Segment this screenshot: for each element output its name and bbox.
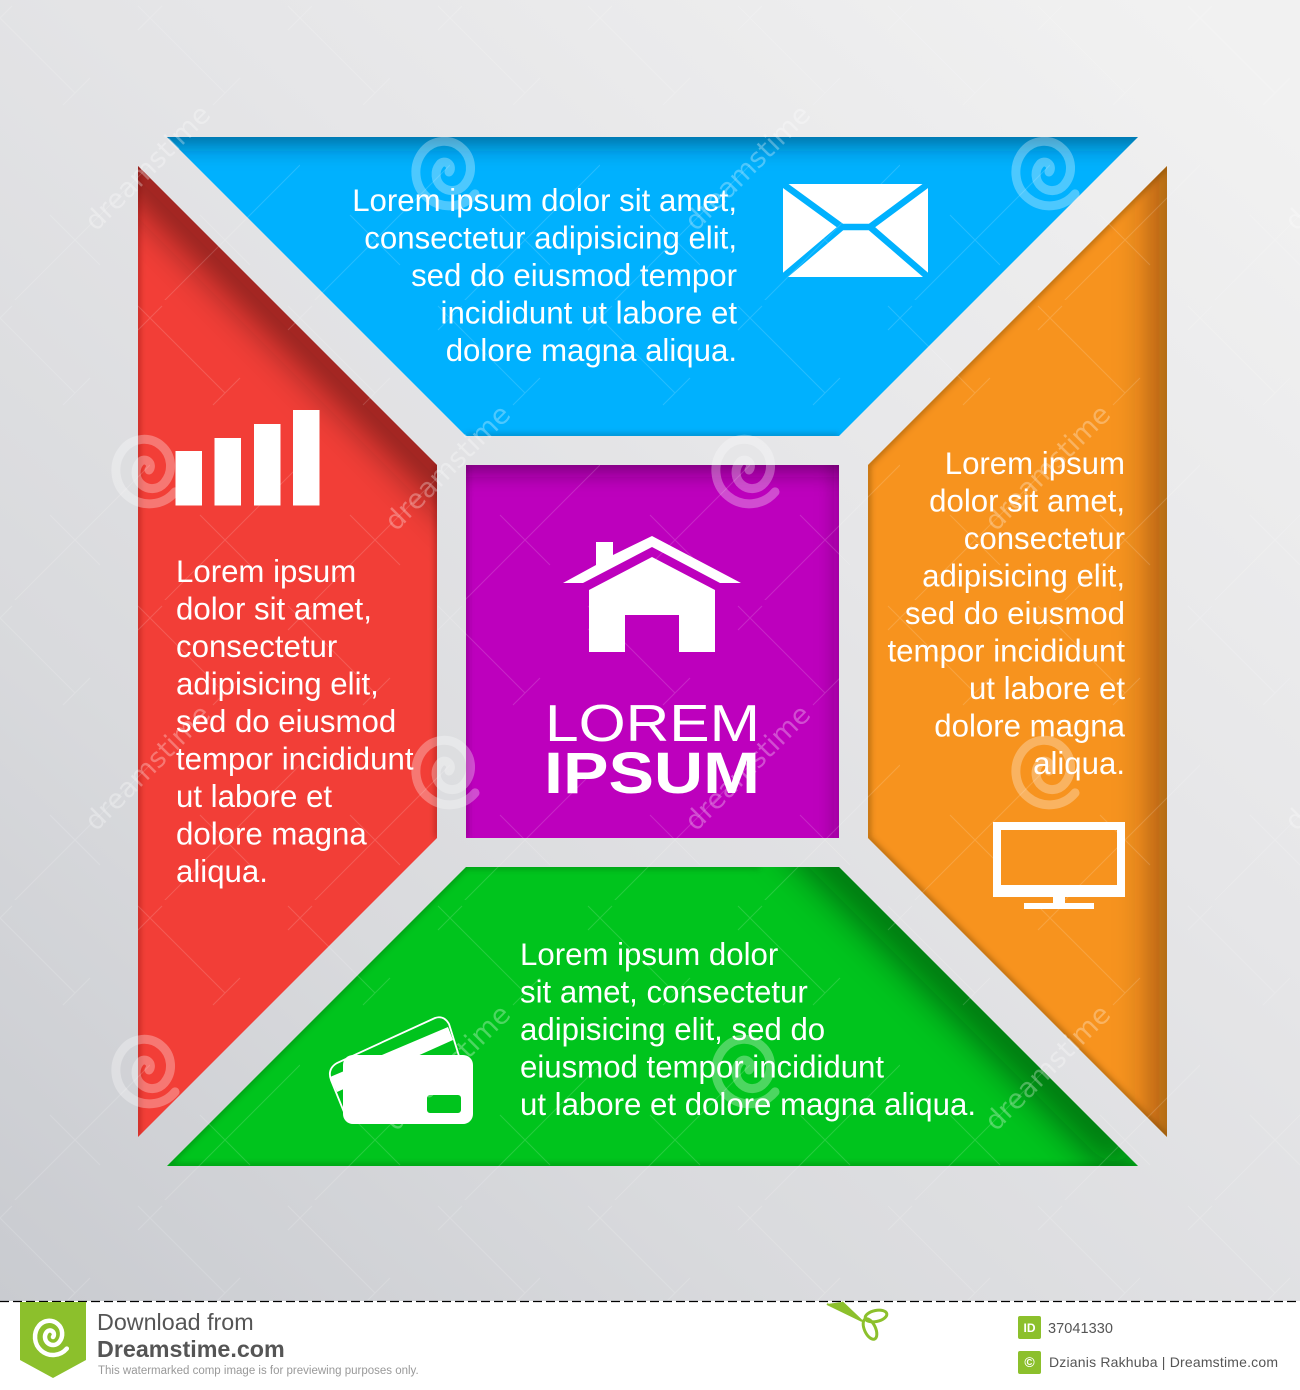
author row: Dzianis Rakhuba | Dreamstime.com <box>1049 1354 1278 1370</box>
author row: © <box>1024 1354 1035 1370</box>
icon: dreamstime badge <box>20 1302 86 1378</box>
text: red panel: ut labore et <box>176 779 332 814</box>
text: red panel: dolore magna <box>176 816 367 852</box>
panel: red left <box>138 166 437 1137</box>
text: orange panel: ut labore et <box>969 671 1125 706</box>
text: orange panel: adipisicing elit, <box>922 558 1125 594</box>
id row: ID <box>1024 1321 1036 1335</box>
text: blue panel: sed do eiusmod tempor <box>411 258 737 293</box>
text: blue panel: consectetur adipisicing elit, <box>364 220 737 256</box>
text: orange panel: dolor sit amet, <box>929 484 1125 518</box>
watermark: dreamstime text: dreamstime <box>79 699 217 837</box>
watermark: dreamstime text: dreamstime <box>379 399 517 537</box>
text: download from: Download from <box>97 1309 254 1335</box>
icon: monitor <box>993 822 1125 909</box>
text: green panel: eiusmod tempor incididunt <box>520 1050 884 1084</box>
text: blue panel <box>352 183 737 368</box>
icon: house <box>563 536 741 652</box>
panel: orange right <box>868 166 1167 1137</box>
text: orange panel: sed do eiusmod <box>905 596 1125 631</box>
text: blue panel: incididunt ut labore et <box>441 296 737 330</box>
watermark: dreamstime text: dreamstime <box>979 999 1117 1137</box>
id row <box>1018 1316 1113 1339</box>
text: green panel: sit amet, consectetur <box>520 974 808 1010</box>
text: red panel: aliqua. <box>176 854 268 889</box>
icon: scissors <box>827 1302 888 1341</box>
author row <box>1018 1351 1278 1374</box>
heading: lorem ipsum <box>544 695 760 806</box>
text: download from <box>97 1309 419 1377</box>
text: green panel: ut labore et dolore magna aliqua. <box>520 1087 976 1122</box>
icon: envelope <box>783 184 928 277</box>
text: red panel: consectetur <box>176 629 337 664</box>
footer strip <box>0 1301 1300 1390</box>
watermark: dreamstime text: dreamstime <box>679 99 817 237</box>
text: download from: Dreamstime.com <box>97 1336 285 1362</box>
heading: lorem ipsum: IPSUM <box>544 741 760 806</box>
text: download from: This watermarked comp image is for previewing purposes only. <box>98 1365 419 1377</box>
watermark: dreamstime text: dreamstime <box>679 699 817 837</box>
watermark: dreamstime text: dreamstime <box>979 399 1117 537</box>
text: orange panel: tempor incididunt <box>887 634 1125 668</box>
watermark: dreamstime text: dreamstime <box>379 999 517 1137</box>
watermark: dreamstime text <box>79 99 1300 1137</box>
text: red panel: sed do eiusmod <box>176 704 396 739</box>
watermark: spirals <box>102 130 1092 1118</box>
heading: lorem ipsum: LOREM <box>545 695 760 753</box>
text: orange panel <box>887 446 1126 781</box>
text: red panel: Lorem ipsum <box>176 554 356 589</box>
text: red panel: tempor incididunt <box>176 742 414 776</box>
text: red panel <box>176 554 414 889</box>
panel: purple centre <box>466 465 839 838</box>
text: green panel: Lorem ipsum dolor <box>520 937 778 972</box>
icon: credit cards <box>330 1017 473 1124</box>
watermark: dreamstime text: dreamstime <box>79 99 217 237</box>
text: green panel <box>520 937 976 1122</box>
text: orange panel: dolore magna <box>934 708 1126 744</box>
text: blue panel: Lorem ipsum dolor sit amet, <box>352 183 737 218</box>
icon: bar chart <box>176 410 320 506</box>
text: orange panel: consectetur <box>964 521 1125 556</box>
text: blue panel: dolore magna aliqua. <box>446 333 737 368</box>
panel: blue top <box>167 137 1138 436</box>
text: red panel: dolor sit amet, <box>176 592 372 626</box>
text: orange panel: aliqua. <box>1033 746 1125 781</box>
text: green panel: adipisicing elit, sed do <box>520 1012 825 1047</box>
text: red panel: adipisicing elit, <box>176 666 379 702</box>
panel: green bottom <box>167 867 1138 1166</box>
text: orange panel: Lorem ipsum <box>945 446 1125 481</box>
id row: 37041330 <box>1048 1321 1113 1337</box>
